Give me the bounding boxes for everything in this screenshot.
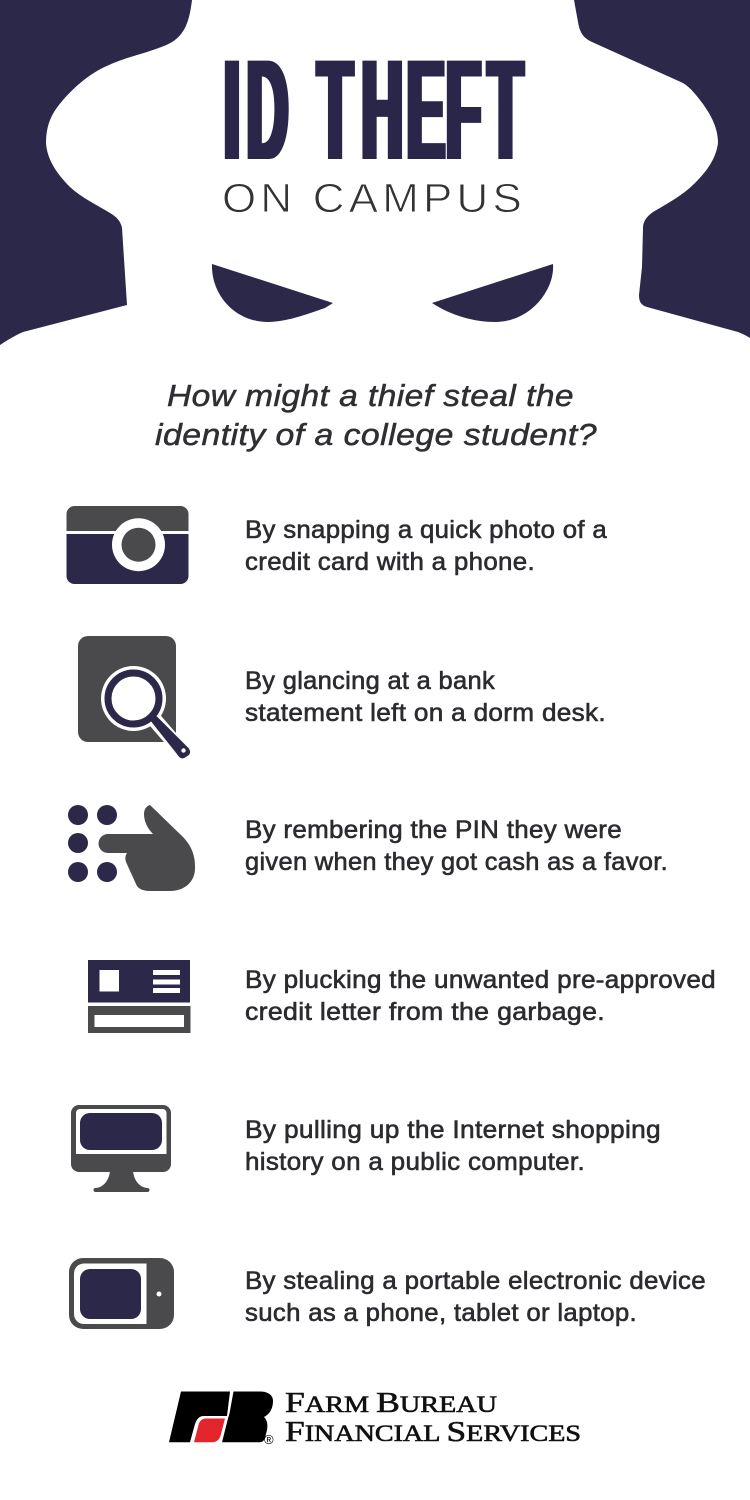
item 5: text [245,1116,661,1176]
mask eye left [212,264,333,322]
logo wordmark: FINANCIAL SERVICES [285,1416,581,1448]
item 2: text [245,667,606,727]
item 2: text: By glancing at a bank [245,667,495,695]
logo: Farm Bureau Financial Services [169,1387,581,1448]
item 5: text: history on a public computer. [245,1148,585,1176]
item 6: text [245,1267,706,1327]
silhouette: left side of hooded figure [0,0,192,345]
item 2: text: statement left on a dorm desk. [245,699,606,727]
mask eye right [432,264,553,322]
item 3: keypad and pointing hand icon [68,805,195,891]
question heading [155,379,597,452]
item 1: camera icon [66,506,188,584]
item 2: magnifier over document icon [78,636,189,757]
item 1: text [245,516,607,576]
logo mark [169,1392,274,1447]
item 3: text [245,816,668,876]
item 3: text: By rembering the PIN they were [245,816,622,844]
question heading: identity of a college student? [155,418,597,452]
item 1: text: credit card with a phone. [245,548,535,576]
item 1: text: By snapping a quick photo of a [245,516,607,544]
title: ID THEFT: ID THEFT [224,30,523,191]
item 4: text: credit letter from the garbage. [245,998,605,1026]
question heading: How might a thief steal the [167,379,574,413]
item 4: text [245,966,716,1026]
item 6: portable device icon [69,1258,174,1329]
logo mark: ® [264,1432,274,1447]
item 6: text: such as a phone, tablet or laptop. [245,1299,637,1327]
item 4: text: By plucking the unwanted pre-approved [245,966,716,994]
item 6: text: By stealing a portable electronic device [245,1267,706,1295]
item 4: credit letter icon [88,960,190,1033]
subtitle: ON CAMPUS: ON CAMPUS [222,175,526,221]
item 3: text: given when they got cash as a favor. [245,848,668,876]
item 5: text: By pulling up the Internet shopping [245,1116,661,1144]
silhouette: right side of hooded figure [574,0,750,338]
logo wordmark: FARM BUREAU [285,1387,497,1419]
logo wordmark [285,1387,581,1448]
item 5: desktop computer icon [71,1105,171,1192]
